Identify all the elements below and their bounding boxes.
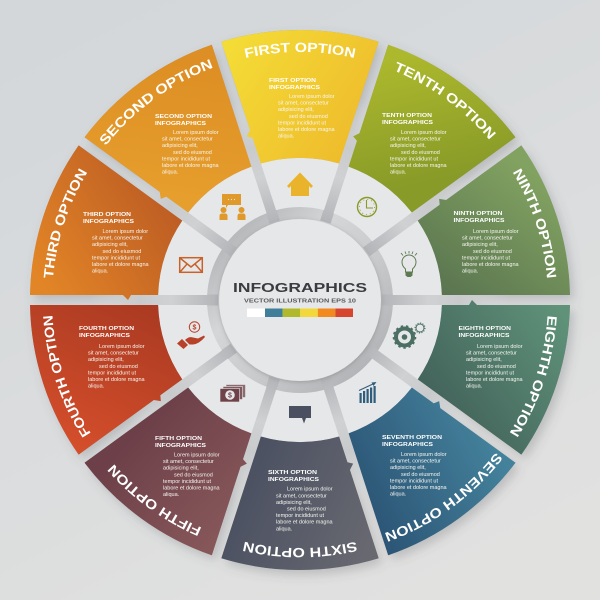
text: seventh option: aliqua.: [390, 492, 407, 498]
icon: hand with coin: [177, 322, 205, 349]
text: fourth option: [79, 326, 146, 390]
title: ninth option: NINTH OPTION: [513, 168, 556, 278]
text: ninth option: labore et dolore magna: [462, 262, 520, 268]
icon: envelope: [180, 258, 202, 272]
text: sixth option: INFOGRAPHICS: [268, 477, 319, 483]
panel: fourth option: [30, 305, 205, 455]
text: eighth option: tempor incididunt ut: [466, 370, 514, 376]
icon: clock: [358, 198, 376, 216]
icon: rising bar chart: [359, 382, 376, 403]
text: first option: aliqua.: [278, 134, 295, 140]
text: seventh option: tempor incididunt ut: [390, 478, 438, 484]
text: third option: labore et dolore magna: [92, 262, 150, 268]
text: eighth option: labore et dolore magna: [466, 377, 524, 383]
text: sixth option: SIXTH OPTION: [268, 470, 317, 476]
text: fifth option: sit amet, consectetur: [163, 459, 214, 465]
centre disc: [219, 219, 381, 381]
text: first option: sed do eiusmod: [289, 114, 328, 120]
text: eighth option: [458, 326, 524, 390]
text: fifth option: FIFTH OPTION: [155, 436, 202, 442]
text: second option: adipisicing elit,: [162, 143, 198, 149]
text: eighth option: sit amet, consectetur: [466, 351, 517, 357]
text: third option: INFOGRAPHICS: [83, 219, 134, 225]
text: second option: INFOGRAPHICS: [155, 121, 206, 127]
panel: first option: [221, 30, 379, 196]
text: second option: [155, 114, 220, 176]
text: fourth option: sit amet, consectetur: [88, 351, 139, 357]
text: fifth option: Lorem ipsum dolor: [174, 452, 220, 458]
text: sixth option: Lorem ipsum dolor: [287, 487, 333, 493]
text: seventh option: [382, 435, 448, 498]
text: third option: aliqua.: [92, 269, 109, 275]
text: seventh option: sed do eiusmod: [401, 472, 440, 478]
text: eighth option: INFOGRAPHICS: [458, 333, 510, 339]
text: fifth option: aliqua.: [163, 492, 180, 498]
text: ninth option: sit amet, consectetur: [462, 236, 513, 242]
text: fifth option: INFOGRAPHICS: [155, 443, 206, 449]
text: third option: adipisicing elit,: [92, 242, 128, 248]
icon: light bulb: [401, 251, 417, 277]
subtitle: VECTOR ILLUSTRATION EPS 10: [244, 298, 356, 304]
text: fourth option: aliqua.: [88, 384, 105, 390]
text: ninth option: Lorem ipsum dolor: [473, 229, 519, 235]
text: first option: adipisicing elit,: [278, 107, 314, 113]
text: third option: sed do eiusmod: [102, 249, 141, 255]
ring and spokes: [90, 100, 510, 500]
icon: speech bubble: [289, 406, 311, 424]
title: tenth option: TENTH OPTION: [396, 62, 496, 140]
text: ninth option: [454, 211, 520, 275]
text: tenth option: sed do eiusmod: [401, 150, 440, 156]
text: fourth option: adipisicing elit,: [88, 357, 124, 363]
icon: banknotes: [220, 384, 246, 402]
title: fifth option: FIFTH OPTION: [108, 464, 201, 536]
text: ninth option: INFOGRAPHICS: [454, 218, 505, 224]
text: sixth option: adipisicing elit,: [276, 500, 312, 506]
text: third option: [83, 212, 150, 275]
icon: hand with coin: $: [193, 324, 197, 332]
text: sixth option: sit amet, consectetur: [276, 493, 327, 499]
text: third option: Lorem ipsum dolor: [102, 229, 148, 235]
text: fourth option: sed do eiusmod: [99, 364, 138, 370]
text: seventh option: Lorem ipsum dolor: [401, 452, 447, 458]
icon: gears: [394, 323, 425, 348]
text: tenth option: TENTH OPTION: [382, 113, 432, 119]
panel: fifth option: [84, 384, 252, 556]
text: tenth option: INFOGRAPHICS: [382, 120, 433, 126]
text: third option: THIRD OPTION: [83, 212, 131, 218]
text: sixth option: sed do eiusmod: [287, 506, 326, 512]
panel: third option: [30, 145, 204, 300]
text: eighth option: sed do eiusmod: [477, 364, 516, 370]
heading: infographics: INFOGRAPHICS: [233, 280, 367, 295]
text: sixth option: tempor incididunt ut: [276, 513, 324, 519]
text: first option: sit amet, consectetur: [278, 101, 329, 107]
icon: banknotes: $: [228, 393, 232, 400]
text: fourth option: tempor incididunt ut: [88, 370, 136, 376]
text: eighth option: aliqua.: [466, 384, 483, 390]
text: second option: aliqua.: [162, 170, 179, 176]
text: eighth option: EIGHTH OPTION: [458, 326, 511, 332]
text: seventh option: SEVENTH OPTION: [382, 435, 442, 441]
text: fourth option: labore et dolore magna: [88, 377, 146, 383]
text: eighth option: adipisicing elit,: [466, 357, 502, 363]
panel: eighth option: [392, 300, 570, 454]
colour bar: [247, 308, 353, 317]
text: tenth option: aliqua.: [390, 170, 407, 176]
icon: two people talking: [220, 194, 246, 220]
text: first option: [269, 78, 336, 140]
text: fifth option: adipisicing elit,: [163, 466, 199, 472]
title: sixth option: SIXTH OPTION: [243, 542, 357, 558]
text: fifth option: sed do eiusmod: [174, 472, 213, 478]
text: third option: sit amet, consectetur: [92, 236, 143, 242]
panel: sixth option: [221, 406, 379, 570]
text: second option: Lorem ipsum dolor: [173, 130, 219, 136]
title: second option: SECOND OPTION: [100, 59, 212, 144]
title: third option: THIRD OPTION: [44, 168, 87, 278]
panel: tenth option: [348, 44, 516, 218]
text: third option: tempor incididunt ut: [92, 255, 140, 261]
text: tenth option: sit amet, consectetur: [390, 137, 441, 143]
text: second option: sed do eiusmod: [173, 150, 212, 156]
text: fifth option: [155, 436, 221, 498]
text: sixth option: labore et dolore magna: [276, 520, 334, 526]
text: tenth option: adipisicing elit,: [390, 143, 426, 149]
text: tenth option: Lorem ipsum dolor: [401, 130, 447, 136]
title: fourth option: FOURTH OPTION: [43, 316, 90, 438]
title: eighth option: EIGHTH OPTION: [510, 316, 557, 437]
text: fourth option: FOURTH OPTION: [79, 326, 134, 332]
text: fourth option: Lorem ipsum dolor: [99, 344, 145, 350]
text: first option: INFOGRAPHICS: [269, 85, 320, 91]
text: ninth option: tempor incididunt ut: [462, 255, 510, 261]
title: first option: FIRST OPTION: [244, 42, 356, 58]
text: seventh option: INFOGRAPHICS: [382, 442, 433, 448]
text: tenth option: [382, 113, 448, 176]
text: fifth option: labore et dolore magna: [163, 486, 221, 492]
text: ninth option: sed do eiusmod: [473, 249, 512, 255]
text: sixth option: [268, 470, 334, 532]
title: seventh option: SEVENTH OPTION: [385, 454, 502, 542]
text: second option: tempor incididunt ut: [162, 156, 210, 162]
text: first option: labore et dolore magna: [278, 127, 336, 133]
text: first option: tempor incididunt ut: [278, 120, 326, 126]
text: ninth option: NINTH OPTION: [454, 211, 502, 217]
panel: second option: [84, 44, 252, 220]
text: seventh option: labore et dolore magna: [390, 485, 448, 491]
text: seventh option: adipisicing elit,: [390, 465, 426, 471]
text: seventh option: sit amet, consectetur: [390, 459, 441, 465]
inner ring segments: [153, 158, 447, 442]
text: fourth option: INFOGRAPHICS: [79, 333, 130, 339]
text: ninth option: adipisicing elit,: [462, 242, 498, 248]
text: tenth option: labore et dolore magna: [390, 163, 448, 169]
text: eighth option: Lorem ipsum dolor: [477, 344, 523, 350]
panel: ninth option: [400, 146, 570, 295]
text: sixth option: aliqua.: [276, 526, 293, 532]
panel: seventh option: [348, 382, 516, 556]
text: ninth option: aliqua.: [462, 269, 479, 275]
text: second option: SECOND OPTION: [155, 114, 212, 120]
text: fifth option: tempor incididunt ut: [163, 479, 211, 485]
text: first option: FIRST OPTION: [269, 78, 316, 84]
text: second option: labore et dolore magna: [162, 163, 220, 169]
text: first option: Lorem ipsum dolor: [289, 94, 335, 100]
text: tenth option: tempor incididunt ut: [390, 156, 438, 162]
icon: house: [287, 172, 313, 196]
text: second option: sit amet, consectetur: [162, 137, 213, 143]
